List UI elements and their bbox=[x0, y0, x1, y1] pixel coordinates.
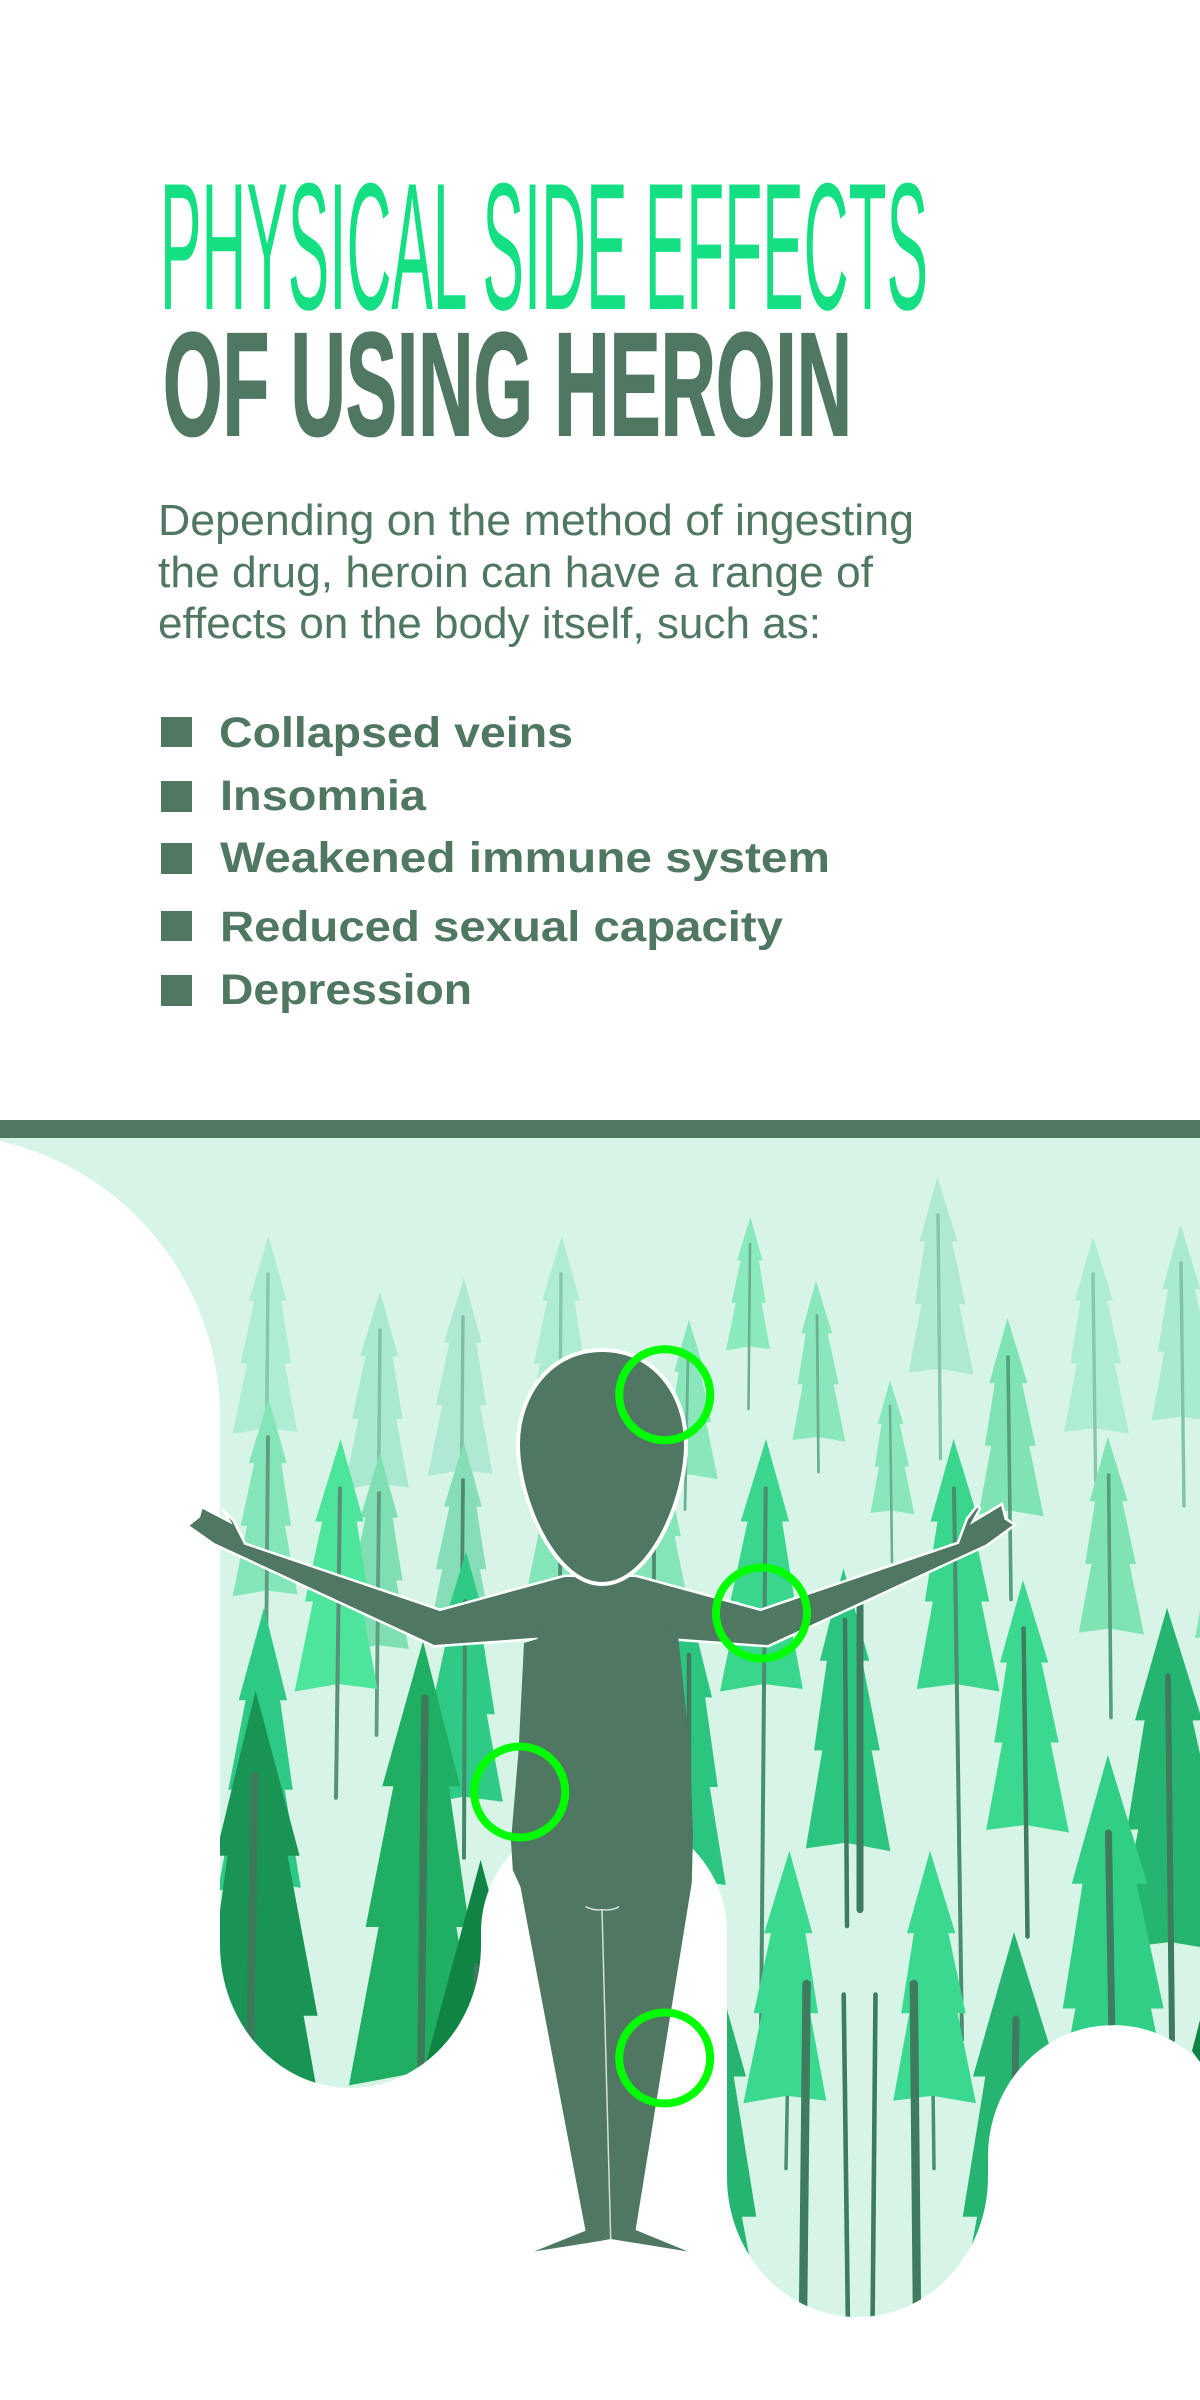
intro paragraph: the drug, heroin can have a range of bbox=[158, 548, 874, 597]
tree right of centre bbox=[986, 1580, 1069, 1936]
bullet: reduced sexual capacity: Reduced sexual capacity bbox=[220, 903, 783, 951]
foreground trunks in right lobe bbox=[803, 1984, 917, 2330]
tree in right lobe, left edge bbox=[727, 2010, 756, 2256]
highlight circle: head bbox=[619, 1349, 710, 1440]
tree behind left of body bbox=[436, 1552, 503, 1860]
mid tree row bbox=[233, 1217, 1200, 1735]
dark tree left lobe bbox=[349, 1641, 482, 2085]
bullet: insomnia: Insomnia bbox=[220, 772, 427, 820]
light tree in right lobe, right bbox=[893, 1851, 976, 2169]
forest panel bbox=[0, 1138, 1200, 2400]
bulleted list of side effects bbox=[161, 709, 830, 1014]
darkest tree left lobe edge bbox=[426, 1860, 489, 2062]
tall dark tree far right bbox=[1128, 1608, 1200, 2042]
highlight circle: leg bbox=[619, 2012, 710, 2104]
green tree far left lobe, back bbox=[218, 1608, 301, 1891]
bright tree row bbox=[295, 1439, 1000, 2040]
divider bar bbox=[0, 1120, 1200, 1138]
head bbox=[518, 1350, 686, 1584]
bullet: collapsed veins: Collapsed veins bbox=[219, 709, 573, 757]
dark sliver far right bbox=[1192, 2020, 1200, 2062]
highlight circle: arm bbox=[716, 1568, 807, 1658]
tree behind right of body bbox=[678, 1641, 726, 1885]
light tree in right lobe, left bbox=[743, 1851, 826, 2169]
torso and legs bbox=[511, 1625, 693, 2252]
intro paragraph: Depending on the method of ingesting bbox=[158, 496, 914, 545]
highlight circle: hip bbox=[474, 1746, 565, 1838]
human figure bbox=[188, 1350, 1015, 2252]
tree lower right bbox=[1062, 1755, 1164, 2034]
palest tree row bbox=[233, 1177, 1200, 1566]
arms bbox=[188, 1504, 1015, 1646]
inner leg line bbox=[586, 1907, 619, 2239]
bullet: depression: Depression bbox=[220, 966, 472, 1014]
dark tree far left bbox=[220, 1691, 318, 2083]
intro paragraph bbox=[158, 496, 914, 648]
tree in right lobe, centre bbox=[962, 1932, 1049, 2245]
intro paragraph: effects on the body itself, such as: bbox=[158, 599, 821, 648]
tree behind arm with double trunks bbox=[806, 1568, 890, 1926]
bullet: weakened immune system: Weakened immune system bbox=[220, 834, 830, 882]
